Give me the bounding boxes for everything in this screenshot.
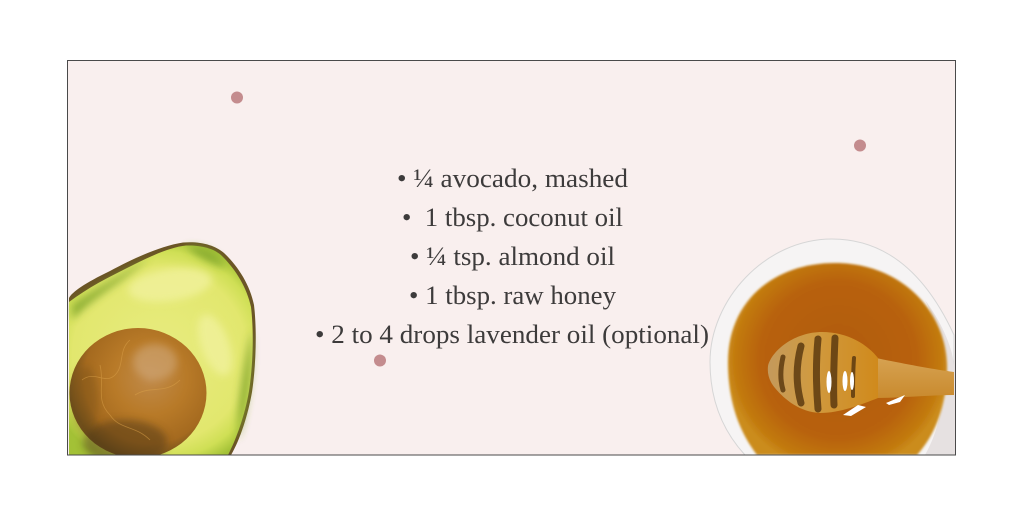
avocado pit	[70, 328, 206, 458]
dipper grooves	[781, 338, 854, 409]
dipper handle	[876, 358, 954, 398]
ingredient: lavender oil: • 2 to 4 drops lavender oil (optional)	[315, 320, 709, 349]
bowl inner shadow	[925, 300, 954, 455]
pit veins	[82, 340, 180, 440]
green rim shading	[72, 246, 252, 440]
icon: avocado half	[69, 242, 256, 464]
panel: pink background	[68, 60, 956, 455]
white bowl	[710, 239, 954, 455]
honey surface	[728, 263, 947, 455]
ingredient: avocado: • ¼ avocado, mashed	[397, 164, 628, 193]
ingredient: coconut oil: • 1 tbsp. coconut oil	[402, 203, 623, 232]
avocado flesh	[69, 245, 253, 455]
infographic canvas	[67, 60, 956, 456]
dipper head	[768, 332, 878, 413]
dipper highlights	[826, 371, 905, 416]
ingredient: almond oil: • ¼ tsp. almond oil	[410, 242, 615, 271]
decorative dot: top right	[854, 140, 866, 152]
decorative dot: below list	[374, 354, 386, 366]
pit shadow	[83, 420, 167, 464]
avocado skin	[69, 242, 256, 455]
pale flesh highlights	[126, 263, 239, 380]
decorative dot: top left	[231, 92, 243, 104]
pit highlight	[133, 344, 177, 380]
ingredient list	[315, 164, 709, 349]
icon: bowl of honey with dipper	[710, 239, 954, 455]
ingredient: raw honey: • 1 tbsp. raw honey	[409, 281, 616, 310]
